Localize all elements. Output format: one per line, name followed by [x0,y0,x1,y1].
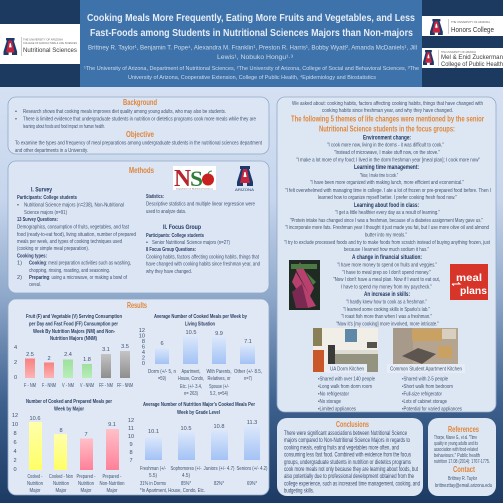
heading: background: Background [123,98,157,107]
chart: cooked and prepared meals by major: 8 [59,428,63,434]
theme: learning about food in class: Learning about food in class: [354,202,419,209]
logo: Honors College [422,16,503,36]
chart: cooked meals by grade level: 12 [128,418,134,424]
chart: cooked meals by living situation: 10.5 [186,330,196,336]
logo: Zuckerman College of Public Health: Mel & Enid Zuckerman [441,55,503,61]
conclusions text [284,430,420,494]
conclusions text: There were significant associations between Nutritional Science [284,430,407,437]
chart: cooked meals by grade level: Week by Grade Level [177,410,220,416]
chart: fruit, vegetable and fast food consumption: 4 [14,345,17,351]
image: cookbook cover [289,260,320,310]
survey column: Demographics, consumption of fruits, vegetables, and fast [17,224,129,230]
chart: cooked and prepared meals by major: 10 [12,422,18,428]
panel: conclusions [277,418,423,496]
theme: change in financial situation: I have to spend my money from my paycheck." [341,284,432,290]
chart: cooked meals by living situation: 6 [160,341,164,347]
logo: University of Arizona [235,166,254,192]
statistics: used to analyze data. [146,209,186,215]
chart: cooked meals by living situation: Other (+/- 8.5, [234,369,262,375]
chart: cooked meals by grade level [128,402,268,494]
chart: cooked and prepared meals by major: Number of Cooked and Prepared Meals per [26,399,113,405]
chart: fruit, vegetable and fast food consumption: Fruit (F) and Vegetable (V) Serving Consumption [26,314,122,320]
survey column: • [17,202,19,208]
chart: cooked meals by grade level: 10.8 [214,424,224,430]
background bullets: There is limited evidence that undergraduate students in nutrition or dietetics programs cook more meals while they are [23,116,256,122]
conclusions text: cooking meals, eating fruits and vegetables more often, and [284,444,399,452]
chart: cooked and prepared meals by major: Prepared - [102,474,122,480]
theme: learning about food in class: because I learned how much sodium it has." [344,247,429,253]
theme: change in financial situation: A change in financial situation: [352,254,422,261]
chart: fruit, vegetable and fast food consumption: F - NM [24,383,36,389]
chart: cooked and prepared meals by major: 10.6 [30,416,40,422]
affiliations: ¹The University of Arizona, Department of Nutritional Sciences, ²The University of Arizona, College of Social and Behavioral Sciences, ³The [84,66,419,72]
heading: five themes [291,114,484,134]
logo: Honors College: THE UNIVERSITY OF ARIZONA [451,21,490,24]
heading: five themes: Nutritional Science students in the focus groups: [319,124,455,134]
chart: cooked and prepared meals by major: Major [80,488,92,494]
chart: cooked and prepared meals by major: Non-Nutrition [100,481,124,487]
chart: cooked and prepared meals by major: Major [106,488,118,494]
chart: cooked meals by grade level: 5.5) [149,473,157,479]
panel: methods [8,161,269,293]
logo: NS Nutritional Sciences: Department of Nutritional Sciences [176,187,214,190]
conclusions text: also potentially due to professional development obtained from the [284,473,414,480]
theme: increase in skills: "I learned some cooking skills in Sparks's lab." [343,307,430,313]
chart: cooked meals by living situation: House, Condo, [178,376,204,382]
theme: increase in skills [336,291,439,328]
chart: cooked meals by grade level: 85%* [181,481,192,487]
authors [88,44,417,61]
background bullets: • [15,116,17,122]
list: apartment kitchen features: •Lots of cabinet storage [402,399,447,405]
contact details [435,476,492,489]
logo: NS Nutritional Sciences: N [174,166,192,192]
panel: results [8,299,269,495]
chart: cooked and prepared meals by major: 7 [84,432,88,438]
chart: cooked meals by living situation: Average Number of Cooked Meals per Week by [154,314,248,320]
conclusions text: consuming less fast food. Combined with evidence from the focus [284,452,411,458]
chart: fruit, vegetable and fast food consumption: 2.4 [64,352,72,358]
heading: conclusions: Conclusions [336,420,369,429]
chart: cooked and prepared meals by major: Nutrition [78,481,94,487]
theme: learning about food in class: "I get a little healthier every day as a result of learning." [335,210,440,216]
intro text: cooking habits since freshman year, and why they have changed. [322,108,453,114]
heading: references: References [448,425,479,434]
chart: cooked and prepared meals by major: Cooked - [28,474,43,480]
survey column: Cooking: meal preparation activities such as washing, [29,260,131,266]
chart: fruit, vegetable and fast food consumption: V - NM [62,383,74,389]
theme: change in financial situation: "I have to meal prep so I don't spend money." [342,270,431,276]
focus group column: have changed with cooking habits since freshman year, and [146,262,260,268]
theme: environment change [296,134,480,164]
theme: environment change: Environment change: [363,134,411,142]
image: meal plans graphic: meal [456,272,482,284]
logo: Nutritional Sciences: THE UNIVERSITY OF ARIZONA [23,38,63,42]
panel: background and objective [8,97,269,154]
theme: change in financial situation [333,254,440,290]
chart: cooked and prepared meals by major: 8 [13,431,17,437]
reference text [434,435,490,465]
chart: cooked meals by grade level: 10 [128,434,134,440]
chart: fruit, vegetable and fast food consumption: FF - NM [99,383,113,389]
image: dorm kitchen [313,328,378,372]
chart: fruit, vegetable and fast food consumption: 0 [14,375,17,381]
chart: fruit, vegetable and fast food consumption: 3.1 [102,347,110,353]
chart: fruit, vegetable and fast food consumption: V - NNM [80,383,94,389]
list: dorm kitchen features: •No storage [318,399,341,405]
chart: cooked meals by living situation: Relatives, or [208,376,231,382]
image: meal plans graphic [450,264,488,300]
logo: Zuckerman College of Public Health: THE UNIVERSITY OF ARIZONA [441,51,476,54]
chart: cooked meals by living situation: Dorm (+/- 5, n [148,369,176,375]
theme: learning about food in class: butter into my meals." [365,232,407,238]
chart: fruit, vegetable and fast food consumption [14,314,133,389]
chart: fruit, vegetable and fast food consumption: 3.5 [121,344,129,350]
theme: change in financial situation: "Now I don't have a meal plan. Now if I want to eat out, [333,277,440,283]
chart: cooked meals by living situation: 2 [142,356,145,362]
background bullets [15,109,256,130]
chart: cooked meals by grade level: 4.5) [182,473,190,479]
chart: cooked meals by living situation: With Parents, [206,369,232,375]
chart: cooked meals by living situation: 0 [142,361,145,367]
theme: learning time management: learned how to organize myself better. I prefer cooking fresh food now." [318,195,457,201]
survey column: food (ready-to-eat food), living situation, number of prepared [17,232,136,238]
theme: increase in skills: "I roast fish more than when I was a freshman." [341,314,432,320]
chart: cooked and prepared meals by major: Nutrition [53,481,69,487]
logo: University of Arizona: ARIZONA [235,187,254,192]
chart: cooked meals by grade level: 31% in Dorms [140,481,166,487]
theme: learning time management: "I have been more organized with making lunch, more efficient and economical." [310,180,464,186]
chart: cooked meals by grade level: Average Number of Nutrition Major's Cooked Meals Per [143,402,256,408]
chart: fruit, vegetable and fast food consumption: 2.5 [26,352,34,358]
survey column: meals per week, and types of cooking techniques used [17,239,122,245]
heading: focus group: II. Focus Group [163,224,201,231]
caption: apartment kitchen [387,364,465,373]
list: dorm kitchen features: •Shared with over 140 people [318,376,375,382]
logo: Nutritional Sciences: COLLEGE OF AGRICULTURE & LIFE SCIENCES [23,42,77,45]
theme: increase in skills: An increase in skills: [364,291,410,298]
chart: cooked meals by living situation: =59) [158,376,166,382]
chart: fruit, vegetable and fast food consumption: 2 [47,356,51,362]
chart: cooked and prepared meals by major: 6 [13,440,17,446]
chart: cooked meals by grade level: 9 [129,442,133,448]
chart: cooked meals by living situation: 8 [142,339,145,345]
chart: cooked meals by grade level: 11 [128,426,134,432]
reference text: behaviours." Public health [434,453,480,459]
conclusions text: groups, undergraduate students in nutrition or dietetics programs [284,459,411,466]
survey column: Nutritional Science majors (n=238), Non-Nutritional [24,202,124,208]
chart: fruit, vegetable and fast food consumption: F - NNM [42,383,56,389]
survey column: Science majors (n=91) [24,210,67,216]
logo: Honors College: Honors College [451,27,494,34]
chart: cooked and prepared meals by major: Major [56,488,67,494]
logo: Nutritional Sciences [0,24,80,64]
conclusions text: majors compared to Non-Nutritional Science Majors in regards to [284,437,410,444]
objective text [15,140,262,154]
survey column: Participants: College students [17,195,77,201]
theme: change in financial situation: "I have more money to spend on fruits and veggies." [337,262,437,268]
theme: learning about food in class [284,202,490,253]
logo: NS Nutritional Sciences [173,166,216,192]
chart: cooked meals by grade level: 10.1 [148,429,159,435]
survey column: 13 Survey Questions: [17,217,58,223]
objective text: and other departments in a University. [15,148,88,154]
background bullets: Research shows that cooking meals improves diet quality among young adults, who may also be students. [23,109,226,115]
list: dorm kitchen features: •No refrigerator [318,392,349,398]
chart: cooked meals by grade level: 82%* [214,481,225,487]
heading: results: Results [127,301,147,310]
chart: fruit, vegetable and fast food consumption: 2 [14,360,17,366]
statistics [146,194,255,215]
chart: cooked meals by grade level: 7 [129,458,133,464]
focus group column: 8 Focus Group Questions: [146,247,196,253]
theme: learning time management: "Now, I make time to cook." [360,173,398,179]
focus group column: Participants: College students [146,233,204,239]
statistics: Descriptive statistics and multiple linear regression were [146,202,255,208]
chart: cooked meals by grade level: 11.3 [247,420,257,426]
survey column: (cooking or simple meal preparation). [17,246,89,252]
header band [0,0,503,87]
image: apartment kitchen [393,328,458,364]
list: apartment kitchen features [402,376,462,412]
chart: cooked and prepared meals by major: Nutrition [27,481,43,487]
survey column: chopping, rinsing, roasting, and seasoning. [29,268,110,274]
heading: survey: I. Survey [31,186,52,194]
chart: cooked meals by living situation: 10 [139,334,145,340]
title [87,12,415,39]
theme: learning time management: Learning time management: [354,164,419,171]
authors: Lewis¹, Nobuko Hongu¹·³ [217,54,293,61]
chart: fruit, vegetable and fast food consumption: Nutrition Majors (NNM) [50,336,97,342]
chart: cooked meals by grade level: *In Apartment, House, Condo, Etc. [140,488,205,494]
chart: cooked and prepared meals by major: 2 [13,458,17,464]
logo: Zuckerman College of Public Health [422,48,503,68]
chart: cooked meals by grade level: Freshman (+/- [140,466,166,472]
list: apartment kitchen features: •Potential for varied appliances [402,406,462,412]
focus group column: Senior Nutritional Science majors (n=27) [152,240,230,246]
chart: cooked and prepared meals by major: 4 [13,449,17,455]
chart: cooked and prepared meals by major: 12 [12,413,18,419]
title: Fast-Foods among Students in Nutritional Sciences Majors than Non-majors [90,27,413,39]
chart: cooked meals by grade level: 69%* [247,481,258,487]
chart: fruit, vegetable and fast food consumption: Week By Nutrition Majors (NM) and Non- [33,329,115,335]
chart: cooked meals by grade level: Seniors (+/- 4.2) [236,466,268,472]
chart: cooked and prepared meals by major [12,399,124,494]
list: dorm kitchen features [318,376,375,412]
chart: cooked and prepared meals by major: Prepared - [76,474,96,480]
affiliations: University of Arizona, Cooperative Extension, College of Public Health, ⁴Epidemiology and Biostatistics [128,74,376,81]
chart: cooked and prepared meals by major: 0 [13,467,17,473]
logo: Nutritional Sciences: Nutritional Sciences [23,47,78,54]
reference text: association with food-related [434,447,478,453]
theme: increase in skills: "I hardly knew how to cook as a freshman." [346,300,427,306]
focus group column: • [146,240,148,246]
theme: increase in skills: "Now it's [my cooking] more involved, more intricate." [336,322,439,328]
intro text [292,101,483,114]
chart: fruit, vegetable and fast food consumption: FF - NNM [117,383,133,389]
panel: focus group themes [277,97,496,412]
chart: cooked and prepared meals by major: Major [30,488,41,494]
chart: cooked meals by living situation: 6 [142,344,145,350]
heading: objective: Objective [126,130,154,139]
conclusions text: college experience, such as increased time management, cooking, and [284,480,420,488]
chart: cooked meals by grade level: 8 [129,450,133,456]
title: Cooking Meals More Frequently, Eating More Fruits and Vegetables, and Less [87,12,415,24]
chart: cooked meals by grade level: Sophomores (+/- [170,466,202,472]
chart: cooked meals by living situation: n=7) [244,376,252,382]
survey column: Preparing: using a microwave, or making a bowl of [29,275,127,281]
background bullets: • [15,109,17,115]
chart: cooked meals by living situation: 9.9 [215,331,223,337]
authors: Brittney R. Taylor¹, Benjamin T. Pope⁴, Alexandra M. Franklin¹, Preston R. Harris¹, Bobby Wyatt², Amanda McDaniels¹, Jill [88,44,417,52]
list: dorm kitchen features: •Long walk from dorm room [318,384,372,390]
chart: cooked meals by grade level: 10.5 [181,426,191,432]
chart: fruit, vegetable and fast food consumption: 1.8 [83,357,91,363]
logo: NS Nutritional Sciences: S [190,166,203,191]
chart: cooked meals by living situation: 7.1 [244,339,252,345]
chart: cooked meals by living situation: 4 [142,350,145,356]
survey column: 2) [17,275,22,281]
caption: dorm kitchen [327,364,367,373]
survey column [17,186,136,288]
chart: fruit, vegetable and fast food consumption: per Day and Fast Food (FF) Consumption per [29,322,119,328]
survey column: Cooking types: [17,254,47,260]
focus group column: why they have changed. [145,269,192,275]
list: dorm kitchen features: •Limited appliances [318,406,356,412]
affiliations [84,66,419,81]
survey column: cereal. [29,282,41,288]
chart: cooked meals by living situation: Spouse (+/- [209,384,229,390]
chart: cooked meals by living situation: n= 263) [184,391,198,397]
caption: apartment kitchen: Common Student Apartment Kitchen [390,366,462,372]
conclusions text: budgeting skills. [284,488,314,494]
chart: cooked meals by living situation: Living Situation [185,322,215,328]
chart: cooked meals by living situation: 5.2, n=54) [210,391,228,397]
statistics: Statistics: [146,194,164,200]
survey column: 1) [17,260,22,266]
caption: dorm kitchen: UA Dorm Kitchen [330,366,364,372]
conclusions text: cook more meals not only because they are learning about foods, but [284,466,418,473]
chart: cooked and prepared meals by major: Week by Major [54,406,85,412]
chart: cooked meals by living situation [139,314,262,397]
theme: environment change: "Instead of microwave, I make stuff now, on the stove." [334,150,440,156]
heading: methods: Methods [129,166,154,175]
chart: cooked and prepared meals by major: Cooked - Non [49,474,73,480]
theme: learning time management [285,164,491,201]
heading: contact: Contact [453,465,475,474]
background bullets: learning about foods and food impact on human health. [23,124,105,130]
chart: cooked meals by living situation: 12 [139,328,145,334]
chart: cooked meals by living situation: Apartment, [182,369,201,375]
theme: environment change: "I cook more now, living in the dorms - it was difficult to cook." [327,142,444,148]
chart: cooked meals by living situation: Etc. (+/- 3.4, [180,384,202,390]
chart: cooked and prepared meals by major: 9.1 [108,422,116,428]
list: apartment kitchen features: •Shared with 2-5 people [402,376,448,382]
list: apartment kitchen features: •Short walk from bedroom [402,384,453,390]
contact details: Brittney R. Taylor [448,476,477,482]
focus group column: Cooking habits, factors affecting cooking habits, things that [146,254,259,260]
objective text: To examine the types and frequency of meal preparations among undergraduate students in the nutritional sciences department [15,140,262,146]
chart: cooked meals by grade level: Juniors (+/- 4.7) [204,466,235,472]
focus group column [145,224,260,275]
image: meal plans graphic: plans [460,285,487,297]
panel: references and contact [428,418,496,496]
list: apartment kitchen features: •Full-size refrigerator [402,392,442,398]
